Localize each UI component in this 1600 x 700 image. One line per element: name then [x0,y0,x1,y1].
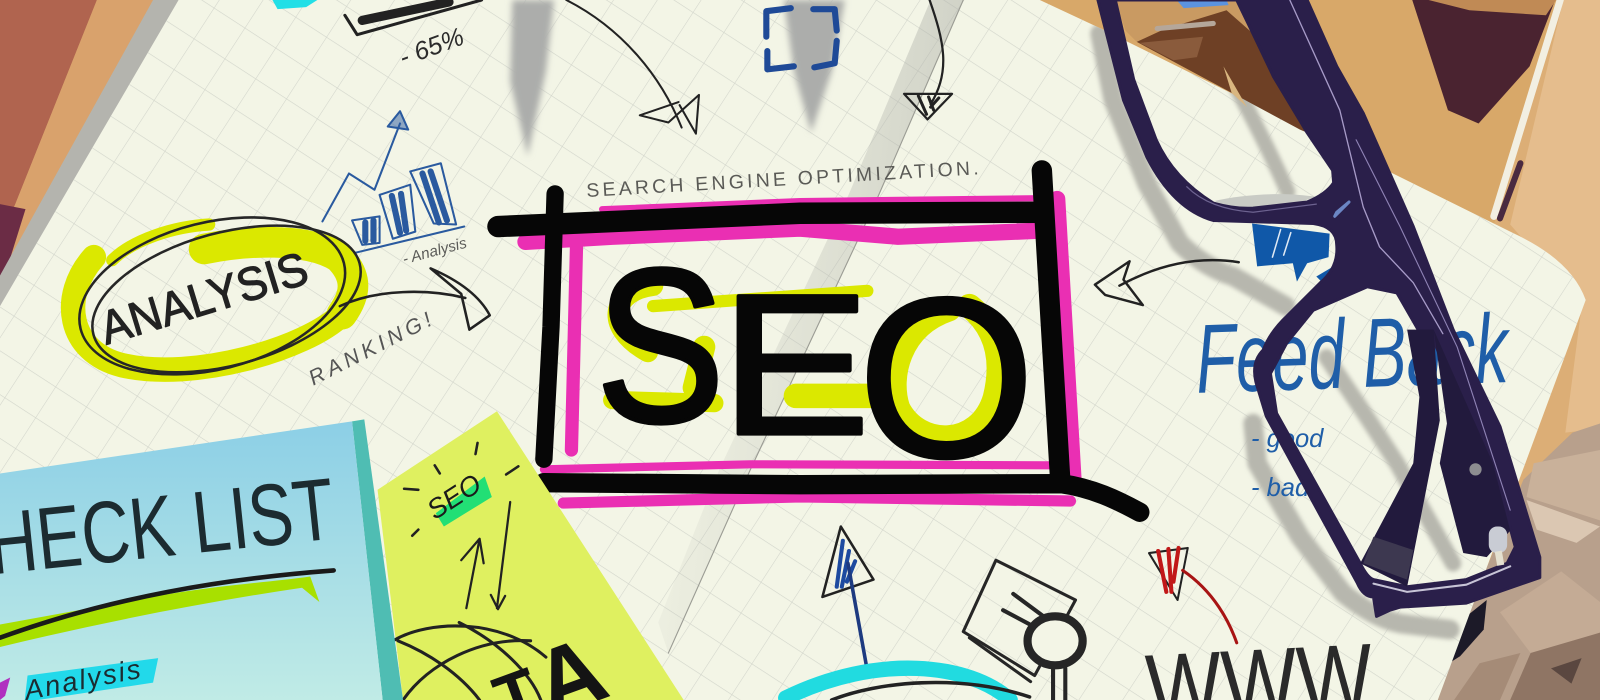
chart: blue bars with rising arrow [322,111,464,253]
text: -65%: - 65% [396,23,468,72]
desk background: right wood [1040,0,1600,433]
SEO letter highlights [612,286,999,438]
text: RANKING!: RANKING! [305,308,436,390]
text: bad: - bad. [1251,474,1316,502]
icon: red arrow [1149,548,1237,643]
arrow: pointing at the frame [1095,260,1239,305]
blue scribble above Feedback [1252,223,1339,284]
arrow: top right curve [904,0,952,119]
SEO frame: black strokes [498,170,1140,512]
glasses shadow on paper [1100,34,1453,630]
arrow: top curve to the paper plane [566,0,699,134]
centre fold [658,0,963,653]
sticky globe [395,622,546,700]
scribble top: cyan mark [272,0,317,9]
title: SEO: E [720,254,870,477]
scribble: cyan arc [786,668,1010,700]
magenta mark [0,678,10,700]
crumpled paper [1438,423,1600,700]
scribble top: hatched box [345,0,482,35]
glasses: highlights and hinge [1187,0,1510,592]
scribble: black arc [832,683,1030,700]
icon: blue brackets [766,8,837,69]
pencil shadows [510,0,845,156]
icon: up arrow blue and black [822,527,873,677]
glasses: lens contents [1115,0,1316,209]
text: ANALYSIS: ANALYSIS [94,242,314,354]
sticky rays [404,443,518,536]
SEO frame: magenta strokes [526,198,1073,503]
analysis hand-drawn circles [63,192,377,400]
sticky arrows [461,502,510,609]
title: SEO [596,223,1036,506]
text: good: - good [1251,425,1324,453]
title: SEO: O [857,249,1036,506]
glasses: crossing temple arms [1360,330,1510,587]
arrow: analysis to ranking [340,268,490,330]
analysis highlight ring [73,224,353,370]
text: SEARCH ENGINE OPTIMIZATION.: SEARCH ENGINE OPTIMIZATION. [586,157,979,202]
lime underline [0,577,319,647]
sticky note: blue check list [0,419,403,700]
cyan highlight [24,658,158,700]
title: SEO: S [596,223,725,468]
glasses: frame [1098,0,1540,616]
text: sticky SEO: SEO [421,468,487,525]
sticky note: yellow [378,411,684,700]
icon: document with magnifier [963,560,1083,700]
text: - Analysis: - Analysis [401,235,469,268]
